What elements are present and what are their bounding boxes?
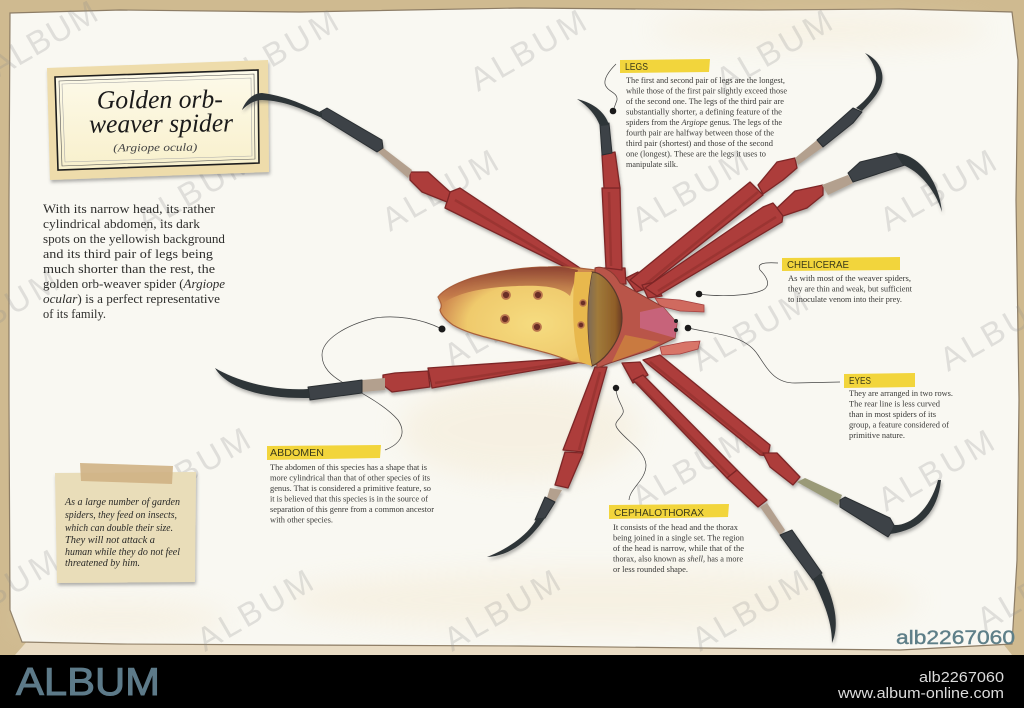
pedipalps bbox=[655, 298, 704, 355]
text: abdomen: The abdomen of this species has a shape that is bbox=[270, 463, 427, 472]
footer id and url: www.album-online.com bbox=[837, 685, 1004, 702]
intro paragraph: With its narrow head, its rather bbox=[43, 202, 216, 216]
watermarks: ALBUM bbox=[871, 422, 1000, 518]
watermarks: ALBUM bbox=[463, 2, 592, 98]
text: eyes: primitive nature. bbox=[849, 431, 905, 440]
text: eyes: The rear line is less curved bbox=[849, 400, 941, 408]
text: eyes: than in most spiders of its bbox=[849, 410, 936, 419]
label: legs: LEGS bbox=[625, 62, 648, 73]
footer logo: ALBUM bbox=[16, 661, 160, 704]
leg: rear left bbox=[215, 358, 577, 400]
text: legs: The first and second pair of legs are the longest, bbox=[626, 76, 785, 85]
note text: spiders, they feed on insects, bbox=[65, 509, 177, 521]
text: legs: fourth pair are halfway between those of the bbox=[626, 128, 774, 138]
note text: human while they do not feel bbox=[65, 546, 180, 558]
title text: (Argiope ocula) bbox=[113, 142, 198, 154]
leg: upper right 2 bbox=[642, 153, 942, 298]
watermarks: ALBUM bbox=[130, 142, 259, 238]
text: legs: spiders from the Argiope genus. The legs of the bbox=[626, 118, 782, 127]
note text: which can double their size. bbox=[65, 522, 173, 534]
text: cephalothorax: being joined in a single set. The region bbox=[613, 534, 745, 542]
title tag bbox=[47, 60, 269, 180]
leg: upper right 1 bbox=[626, 53, 882, 292]
callout line: abdomen bbox=[322, 317, 442, 450]
title text: weaver spider bbox=[89, 108, 234, 139]
text: legs: one (longest). These are the legs it uses to bbox=[626, 150, 766, 158]
leg: front top bbox=[577, 99, 626, 285]
intro paragraph: golden orb-weaver spider ( Argiope bbox=[43, 277, 225, 291]
text: abdomen: with other species. bbox=[270, 516, 333, 524]
text: cephalothorax: thorax, also known as shell, has a more bbox=[613, 554, 743, 564]
text: chelicerae: they are thin and weak, but sufficient bbox=[788, 284, 913, 294]
text: legs: third pair (shortest) and those of the second bbox=[626, 139, 774, 148]
image id watermark: alb2267060 bbox=[896, 628, 1015, 649]
intro paragraph bbox=[43, 202, 226, 321]
note text bbox=[64, 496, 180, 569]
callout: chelicerae bbox=[696, 257, 913, 304]
title text: Golden orb- bbox=[97, 84, 223, 115]
note text: They will not attack a bbox=[65, 534, 155, 546]
text: abdomen bbox=[270, 463, 434, 524]
text: cephalothorax: or less rounded shape. bbox=[613, 565, 688, 574]
label: abdomen: ABDOMEN bbox=[270, 448, 324, 459]
leg: lower right 2 bbox=[622, 362, 836, 643]
eyes bbox=[674, 319, 678, 332]
text: abdomen: genus. That is considered a primitive feature, so bbox=[270, 484, 431, 493]
leg: third pair lower bbox=[487, 367, 607, 557]
text: abdomen: separation of this genre from a common ancestor bbox=[270, 505, 434, 514]
intro paragraph: of its family. bbox=[43, 307, 106, 321]
label: chelicerae bbox=[782, 257, 900, 271]
callout: eyes bbox=[685, 325, 953, 440]
watermarks: ALBUM bbox=[215, 2, 344, 98]
footer id and url: alb2267060 bbox=[919, 669, 1004, 686]
label: eyes bbox=[844, 373, 915, 388]
text: eyes bbox=[849, 389, 953, 440]
text: eyes: They are arranged in two rows. bbox=[849, 389, 953, 398]
label: eyes: EYES bbox=[849, 376, 871, 387]
watermarks: ALBUM bbox=[437, 562, 566, 658]
bottom paper strip bbox=[15, 638, 1012, 655]
intro paragraph: much shorter than the rest, the bbox=[43, 262, 215, 276]
text: legs: substantially shorter, a defining feature of the bbox=[626, 108, 782, 116]
title text bbox=[89, 84, 234, 155]
watermarks: ALBUM bbox=[437, 278, 566, 374]
watermarks: ALBUM bbox=[873, 142, 1002, 238]
spider illustration bbox=[215, 53, 942, 643]
label: legs bbox=[620, 59, 710, 73]
text: eyes: group, a feature considered of bbox=[849, 420, 949, 430]
intro paragraph: cylindrical abdomen, its dark bbox=[43, 217, 201, 231]
watermarks: ALBUM bbox=[625, 142, 754, 238]
watermarks: ALBUM bbox=[625, 420, 754, 516]
abdomen spots bbox=[501, 291, 586, 331]
leg: lower right 1 bbox=[643, 355, 941, 537]
label: cephalothorax bbox=[609, 504, 729, 519]
cephalothorax bbox=[573, 267, 678, 368]
callout: cephalothorax bbox=[609, 385, 745, 574]
footer id and url bbox=[837, 669, 1004, 702]
text: cephalothorax bbox=[613, 523, 745, 574]
watermarks: ALBUM bbox=[709, 2, 838, 98]
leg: front left bbox=[242, 93, 583, 273]
text: legs: while those of the first pair slightly exceed those bbox=[626, 86, 787, 96]
abdomen bbox=[438, 267, 600, 365]
watermarks: ALBUM bbox=[685, 562, 814, 658]
label: chelicerae: CHELICERAE bbox=[787, 260, 849, 271]
text: abdomen: it is believed that this species is in the source of bbox=[270, 494, 428, 504]
footer bar bbox=[0, 655, 1024, 708]
text: cephalothorax: It consists of the head and the thorax bbox=[613, 523, 739, 532]
text: legs: manipulate silk. bbox=[626, 160, 678, 169]
intro paragraph: spots on the yellowish background bbox=[43, 232, 226, 246]
label: abdomen bbox=[267, 445, 381, 460]
note text: threatened by him. bbox=[65, 557, 140, 569]
callout: legs bbox=[605, 59, 787, 169]
text: chelicerae: to inoculate venom into their prey. bbox=[788, 295, 902, 304]
watermarks: ALBUM bbox=[190, 562, 319, 658]
watermarks: ALBUM bbox=[375, 142, 504, 238]
text: legs: of the second one. The legs of the third pair are bbox=[626, 97, 784, 106]
note text: As a large number of garden bbox=[64, 496, 180, 508]
tape bbox=[80, 463, 173, 484]
watermarks: ALBUM bbox=[127, 420, 256, 516]
text: abdomen: more cylindrical than that of other species of its bbox=[270, 474, 430, 482]
watermarks: ALBUM bbox=[685, 282, 814, 378]
text: chelicerae bbox=[788, 274, 913, 304]
sticky note bbox=[55, 463, 196, 583]
callout: abdomen bbox=[267, 326, 446, 524]
text: legs bbox=[626, 76, 787, 169]
text: cephalothorax: of the head is narrow, while that of the bbox=[613, 544, 744, 553]
intro paragraph: and its third pair of legs being bbox=[43, 247, 214, 261]
label: cephalothorax: CEPHALOTHORAX bbox=[614, 508, 704, 519]
text: chelicerae: As with most of the weaver spiders, bbox=[788, 274, 911, 283]
intro paragraph: ocular) is a perfect representative bbox=[43, 292, 220, 306]
